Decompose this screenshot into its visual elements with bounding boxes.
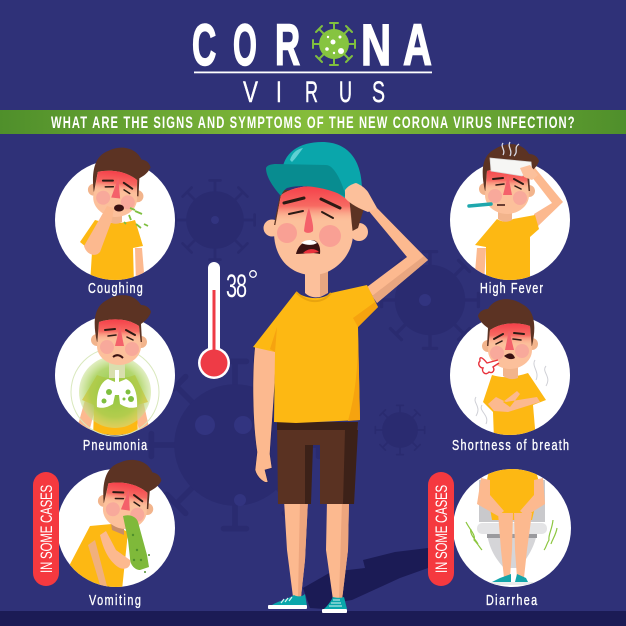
shoes	[492, 574, 528, 582]
steam	[502, 142, 519, 156]
arms	[477, 478, 545, 516]
ears	[264, 220, 280, 236]
shirt	[483, 373, 546, 440]
shoes	[272, 594, 307, 606]
shirt	[487, 469, 538, 520]
face	[274, 186, 353, 275]
mouth	[296, 240, 320, 254]
hand on head	[345, 183, 377, 212]
cap	[282, 142, 362, 198]
left arm	[253, 345, 276, 482]
arm	[100, 531, 130, 569]
green glow	[79, 356, 151, 428]
shirt shading	[270, 302, 378, 421]
toilet	[479, 480, 545, 522]
head, flipped	[478, 299, 538, 369]
title: CORONA: N	[361, 12, 391, 78]
subtitle: VIRUS	[243, 75, 385, 109]
temperature label: 38	[226, 268, 247, 304]
label: coughing: Coughing	[88, 279, 143, 296]
title: CORONA: C	[192, 14, 216, 78]
label: high fever: High Fever	[480, 279, 544, 296]
label: diarrhea: Diarrhea	[486, 591, 538, 608]
crossed arms	[488, 391, 540, 412]
raised arm	[367, 208, 428, 303]
body	[68, 524, 128, 590]
shirt	[253, 285, 378, 423]
breath cloud	[479, 358, 499, 374]
panel: pneumonia	[55, 295, 175, 440]
title: CORONA: R	[275, 14, 300, 78]
wavy lines	[475, 360, 548, 424]
bottom band	[0, 611, 626, 626]
lungs	[97, 370, 137, 408]
label: vomiting: Vomiting	[89, 591, 141, 608]
body	[474, 215, 539, 285]
pill: in some cases right	[428, 472, 454, 586]
lung infection spots	[102, 389, 134, 404]
legs	[498, 513, 532, 578]
main figure shadow	[303, 548, 428, 610]
head	[91, 295, 151, 365]
droplets	[124, 208, 148, 228]
mouth	[497, 204, 505, 206]
hair	[274, 190, 365, 235]
bandage	[490, 158, 532, 176]
neck	[109, 360, 125, 378]
head	[85, 144, 152, 220]
pill: in some cases left	[33, 472, 59, 586]
main figure	[253, 142, 428, 613]
thermometer	[198, 262, 230, 379]
collar	[296, 292, 331, 301]
degree symbol	[250, 271, 256, 277]
label: shortness of breath: Shortness of breath	[452, 436, 569, 453]
subtitle: VIRUS: U	[339, 77, 352, 109]
title rule	[194, 72, 432, 73]
coughing mouth	[114, 204, 124, 212]
subtitle: VIRUS: S	[372, 76, 385, 109]
legs	[284, 500, 349, 600]
panel: high fever	[450, 142, 570, 285]
background virus decorations	[151, 180, 478, 529]
subtitle: VIRUS: V	[243, 75, 258, 109]
neck	[305, 268, 328, 297]
shorts	[277, 422, 358, 504]
head	[479, 144, 539, 214]
coughing arm	[84, 206, 114, 255]
cheeks	[277, 223, 297, 243]
title: CORONA: O	[233, 13, 257, 77]
hand	[520, 165, 538, 180]
mouth	[113, 355, 123, 358]
oral thermometer	[469, 204, 491, 206]
nose	[304, 208, 313, 233]
glow rings	[71, 348, 159, 436]
subtitle: VIRUS: I	[276, 77, 282, 109]
icon: green virus in title	[313, 23, 355, 65]
vomit	[123, 515, 149, 570]
panel: shortness of breath	[450, 299, 570, 440]
mouth	[504, 353, 515, 359]
pill: in some cases right: IN SOME CASES	[433, 485, 452, 573]
label: pneumonia: Pneumonia	[83, 436, 148, 453]
title: CORONA	[192, 12, 432, 78]
stink lines	[466, 520, 557, 550]
panel: coughing	[55, 144, 175, 285]
raised arm	[528, 168, 563, 228]
body	[78, 358, 151, 435]
heading text: WHAT ARE THE SIGNS AND SYMPTOMS OF THE NEW CORONA VIRUS INFECTION?	[51, 113, 575, 132]
panel: vomiting	[57, 456, 175, 590]
title: CORONA: A	[403, 13, 432, 78]
green heading band	[0, 110, 626, 134]
subtitle: VIRUS: R	[305, 77, 318, 109]
head	[95, 456, 164, 533]
eyebrows and eyes	[284, 198, 340, 208]
panel: diarrhea	[453, 465, 571, 587]
vomit specks	[132, 534, 150, 573]
body	[80, 220, 145, 285]
pill: in some cases left: IN SOME CASES	[38, 485, 57, 573]
